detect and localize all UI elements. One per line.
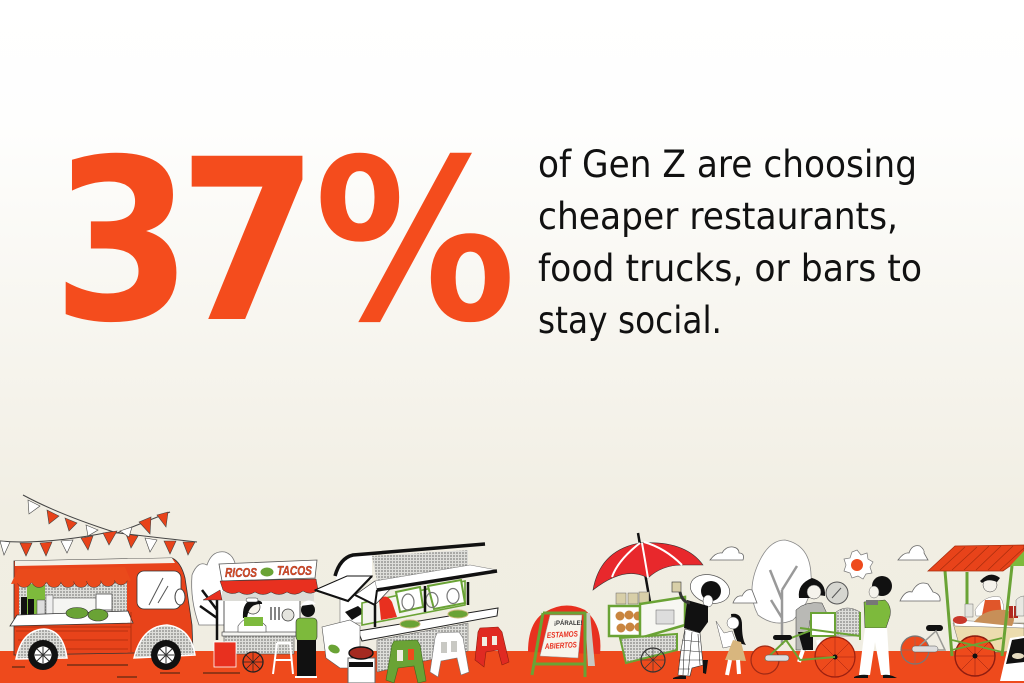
red box [214,642,236,667]
window band [362,581,465,625]
ground shadow strokes [12,665,240,677]
person with hat [672,570,733,679]
sun [844,550,873,579]
description text [538,142,922,342]
green frame [532,613,585,677]
tree behind taco stand [192,552,238,640]
man eating [854,576,897,678]
case [609,606,641,636]
vendor [983,578,997,592]
sign [219,560,317,581]
crate [811,613,835,636]
little girl [716,614,746,675]
cab window [137,571,181,609]
pole [638,533,650,602]
roof [928,545,1024,571]
ground strip [0,651,1024,683]
rear wheel [751,646,779,674]
pot [836,608,860,636]
wheel [243,652,263,672]
umbrella cart [593,533,703,672]
left flaps [315,576,372,601]
lower dotted counter [224,635,294,654]
cups [616,593,626,604]
truck body [14,558,193,655]
wheel [641,648,665,672]
red stool [475,627,509,667]
wheel arches [16,629,67,659]
sandwich board sign: ABIERTOS [544,640,578,651]
counter [10,611,133,626]
shirt [684,600,708,633]
woman [799,578,825,598]
description text: of Gen Z are choosing [538,142,917,186]
grill [348,658,375,683]
vendor cart on the right [901,545,1024,676]
rear leg [585,613,595,666]
bike wheel [901,636,929,664]
front wheel [815,637,855,677]
dress [725,640,746,661]
bunting flags [0,495,197,556]
raised drink [672,582,681,592]
stand body [224,590,300,636]
big statistic: 37%: 37% [52,112,516,373]
cart table [953,623,1024,655]
white stool [430,632,469,677]
hair [701,581,721,601]
customer [296,618,317,641]
description text: stay social. [538,298,722,342]
hair [731,614,746,645]
sandwich board sign: ¡PÁRALE! [554,620,583,627]
base [620,634,677,663]
service window [19,582,127,618]
awning [11,567,131,588]
description text: cheaper restaurants, [538,194,898,238]
utensils on stand [271,607,279,620]
taco stand: RICOS [225,565,257,580]
food pile [974,610,1014,626]
white crate [322,620,360,668]
sandwich board sign [528,605,600,677]
pot lid [826,582,848,604]
tree [752,540,811,645]
lower wall [377,623,468,672]
description text: food trucks, or bars to [538,246,922,290]
stool [273,643,293,674]
umbrella [593,543,703,590]
chalkboard sign [1000,636,1024,681]
green stool [386,640,426,683]
side lines [14,612,131,652]
board [540,615,582,658]
wheels [28,640,58,670]
mirror [175,589,185,605]
vendor [238,618,266,632]
taco stand: TACOS [277,563,312,578]
legs [727,660,739,675]
sandwich board sign: ESTAMOS [547,629,579,640]
food truck [10,558,195,670]
cabin curve [335,555,372,580]
big wheel [955,636,995,676]
food kiosk [315,544,498,683]
taco stand [203,560,318,678]
shoes [673,660,708,679]
clouds [710,546,940,603]
poles [945,566,1012,656]
awning [220,579,318,594]
black roof [335,544,485,576]
red blob [528,605,600,654]
canopy shelf [375,565,497,590]
counter [358,608,498,641]
bicycle cart with vendor woman [751,578,860,677]
checked trousers [678,629,703,676]
